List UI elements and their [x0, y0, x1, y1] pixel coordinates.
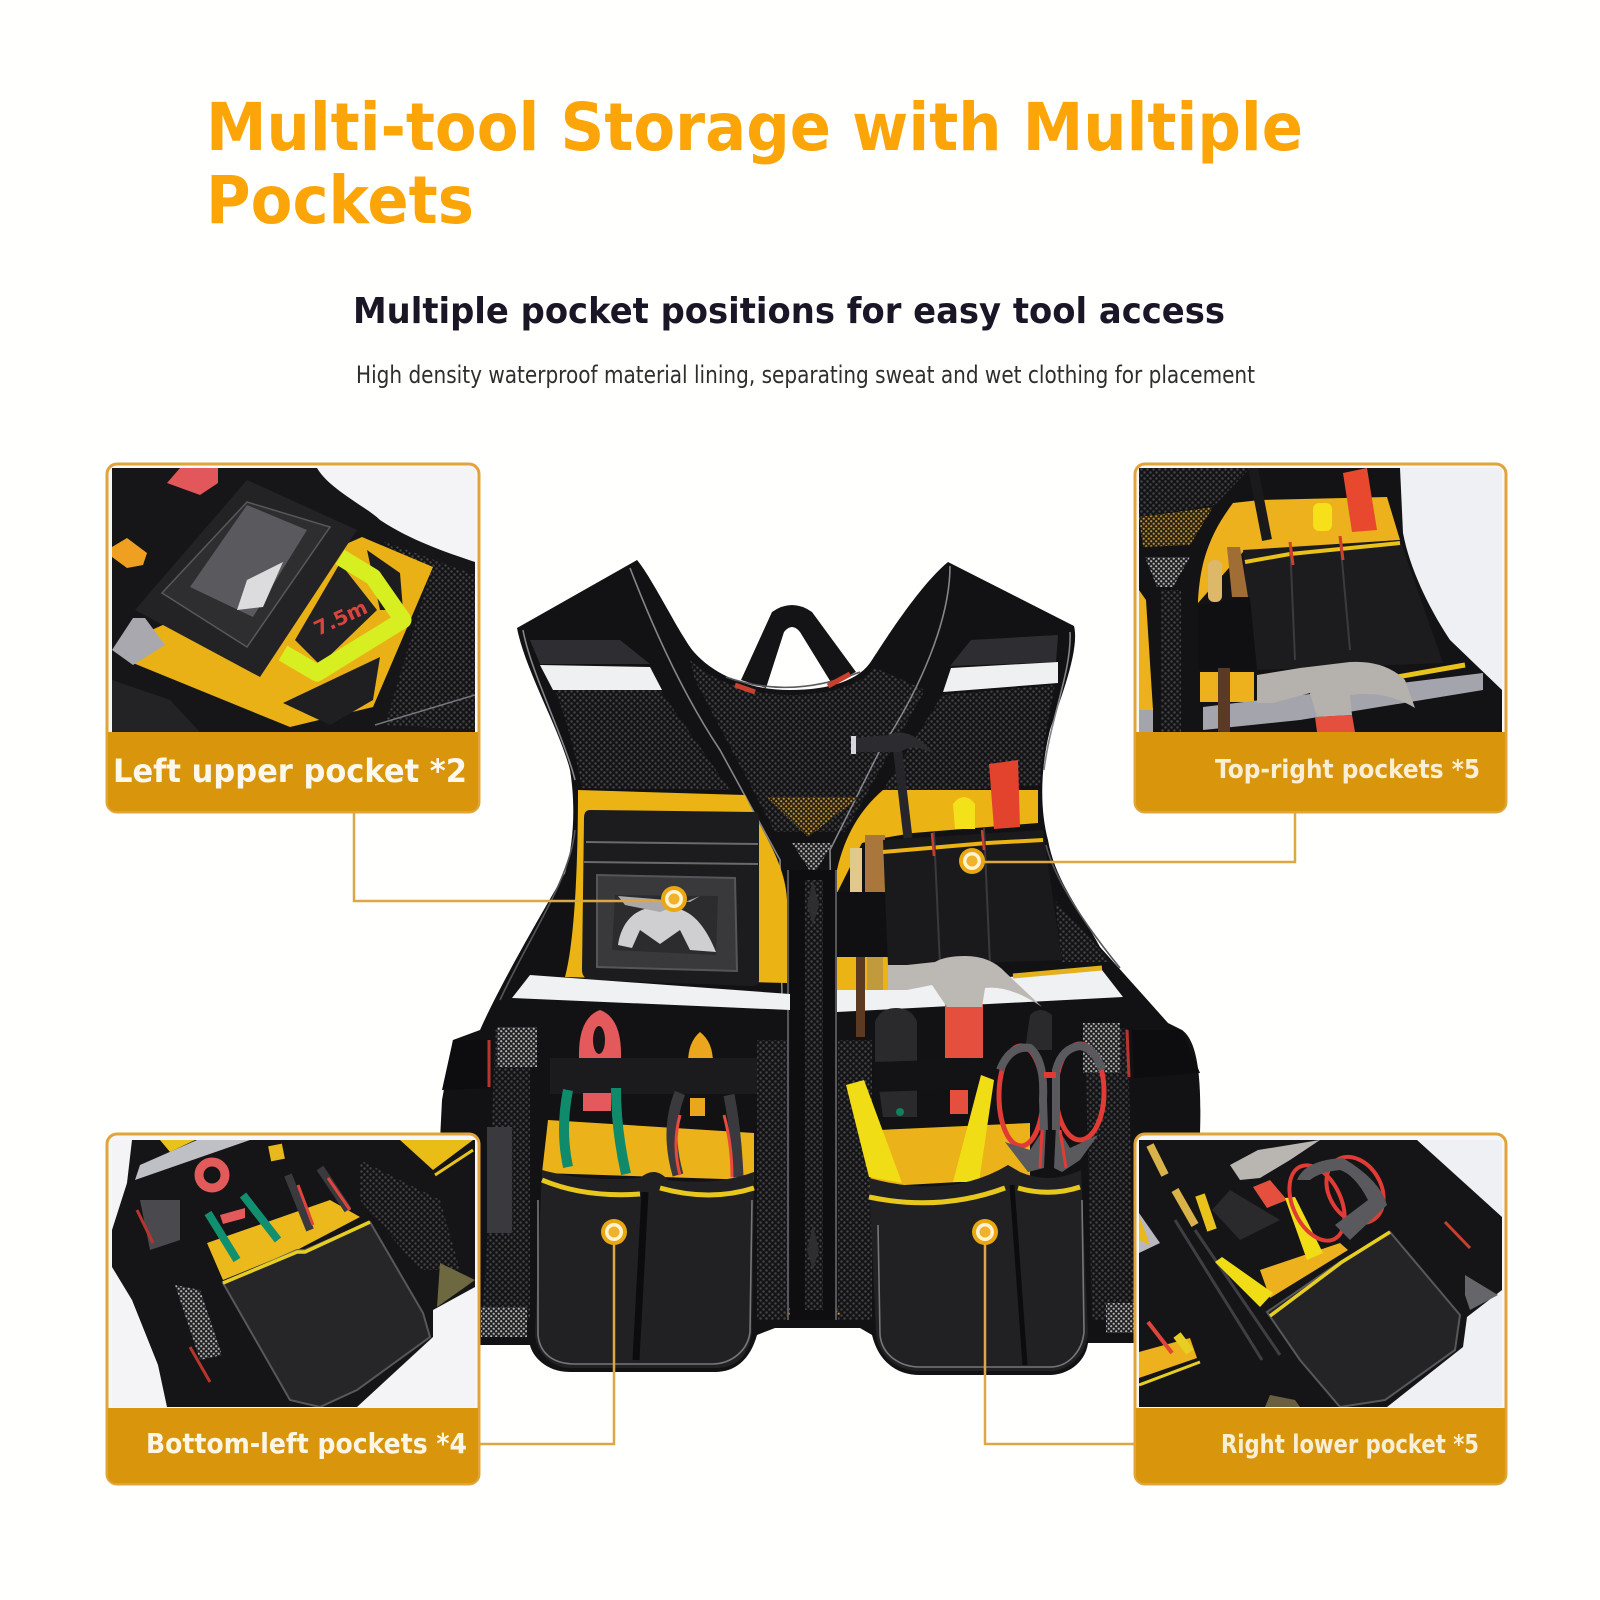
- label text: Right lower pocket *5: [1221, 1430, 1479, 1460]
- left chest pouch with window: [582, 810, 759, 986]
- tool strap: [873, 1058, 1000, 1092]
- lower right pocket: [869, 1165, 1088, 1371]
- title: Pockets: [206, 162, 474, 239]
- loop red tabs: [735, 674, 850, 692]
- marker: right lower pocket: [972, 1219, 998, 1245]
- bottom tan mesh triangle: [785, 1272, 842, 1315]
- pocket seams: [934, 828, 990, 965]
- left yellow panel: [565, 790, 787, 983]
- small hammer: [851, 732, 935, 838]
- leader line: bottom-left pockets: [480, 1244, 614, 1444]
- title: [206, 89, 1303, 239]
- red screwdriver handle: [989, 760, 1020, 829]
- marker: bottom-left pockets: [601, 1219, 627, 1245]
- vest hanging loop: [741, 605, 856, 688]
- screwdriver green bit: [896, 1108, 904, 1116]
- side belt right: [1132, 1030, 1200, 1078]
- white mesh triangle: [792, 843, 833, 876]
- red pliers: [672, 1093, 738, 1177]
- yellow prong right: [953, 1075, 994, 1182]
- photo: right lower pocket: [1139, 1140, 1502, 1407]
- orange tip: [688, 1032, 713, 1063]
- subtitle: Multiple pocket positions for easy tool access: [353, 291, 1225, 332]
- marker: left upper pocket: [661, 886, 687, 912]
- marker: top-right pockets: [959, 848, 985, 874]
- lower reflective stripe right: [837, 970, 1123, 1012]
- reflective stripe left: [540, 665, 662, 690]
- reflective stripe right: [943, 662, 1058, 692]
- lower right tools: [846, 1008, 1104, 1371]
- side mesh panels: [482, 1028, 530, 1320]
- orange lower: [690, 1098, 705, 1116]
- lower left pocket: [535, 1170, 754, 1368]
- photo: left upper pocket: [112, 468, 475, 732]
- center mesh left: [757, 1040, 789, 1320]
- pocket stitch: [538, 1200, 752, 1364]
- leader line: right lower pocket: [985, 1244, 1134, 1444]
- tool strap: [550, 1058, 757, 1094]
- right side mesh near pockets: [1055, 900, 1110, 962]
- yellow pocket lining: [542, 1120, 754, 1180]
- yellow marker: [953, 797, 975, 829]
- pocket trim: [869, 1187, 1080, 1203]
- panel: top-right pockets: [1135, 464, 1506, 812]
- right shoulder padding: [880, 685, 1055, 795]
- label bar: [108, 1408, 478, 1483]
- white mesh patches: [481, 1023, 1134, 1337]
- red cutter handle: [579, 1010, 621, 1058]
- side mesh right: [1085, 1028, 1134, 1320]
- vest body: [440, 560, 1200, 1375]
- lower reflective stripe left: [512, 975, 790, 1010]
- panel: left upper pocket: [107, 464, 479, 812]
- panel: bottom-left pockets: [107, 1134, 479, 1484]
- description text: High density waterproof material lining, separating sweat and wet clothing for placement: [356, 361, 1255, 389]
- pocket divider: [636, 1192, 645, 1360]
- label bar: [1136, 1408, 1505, 1483]
- grey mesh strip: [487, 1127, 512, 1233]
- left shoulder padding: [555, 690, 730, 790]
- label bar: [108, 732, 478, 811]
- claw hammer: [888, 956, 1042, 1058]
- label text: Left upper pocket *2: [113, 752, 467, 790]
- leader line: left upper pocket: [354, 813, 662, 901]
- photo: bottom-left pockets: [112, 1140, 475, 1407]
- pocket stripe: [883, 840, 1043, 852]
- brass and wood files: [837, 835, 890, 1037]
- shoulder highlights: [530, 635, 1058, 666]
- center mesh right: [838, 1040, 872, 1320]
- label text: Bottom-left pockets *4: [146, 1427, 467, 1460]
- stitching: [500, 566, 1120, 1000]
- reflective edge yellow: [1013, 968, 1102, 976]
- yellow pocket lining: [869, 1123, 1030, 1187]
- yellow mesh triangle: [767, 797, 859, 837]
- triple pocket: [883, 830, 1062, 966]
- belt red tabs: [489, 1030, 1129, 1087]
- pocket trim: [542, 1180, 754, 1195]
- label text: Top-right pockets *5: [1215, 755, 1480, 785]
- pocket stitch: [878, 1200, 1084, 1367]
- yellow prong left: [846, 1080, 902, 1183]
- right yellow panel: [837, 790, 1038, 893]
- red cutter lower: [583, 1093, 611, 1111]
- lower left tools: [535, 1010, 757, 1368]
- panel: right lower pocket: [1135, 1134, 1506, 1484]
- scissors: [999, 1044, 1104, 1172]
- title: Multi-tool Storage with Multiple: [206, 89, 1303, 166]
- label bar: [1136, 732, 1505, 811]
- photo: left upper pocket: 7.5m: [310, 595, 371, 641]
- green pliers: [564, 1088, 626, 1174]
- pocket divider: [1012, 1185, 1025, 1365]
- zipper: [788, 870, 836, 1320]
- pocket red stitches: [932, 830, 984, 856]
- side belt left: [442, 1040, 490, 1090]
- photo: top-right pockets: [1139, 468, 1502, 732]
- black screwdriver: [875, 1008, 917, 1117]
- third black tool: [1025, 1010, 1052, 1050]
- vest illustration: [440, 560, 1200, 1375]
- right chest pockets with tools: [837, 732, 1062, 1058]
- chest mesh: [690, 660, 925, 832]
- red hammer lower: [950, 1090, 968, 1114]
- leader line: top-right pockets: [984, 813, 1295, 862]
